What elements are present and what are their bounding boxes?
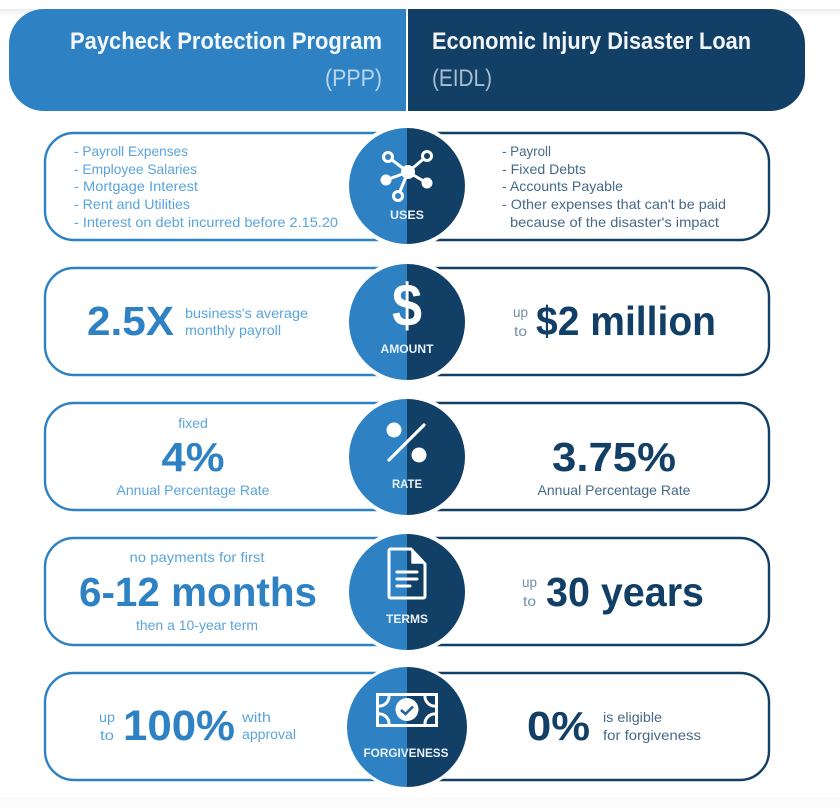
PPP forgiveness: with bbox=[241, 709, 271, 725]
uses badge bbox=[345, 124, 469, 248]
panel: terms bbox=[45, 530, 769, 654]
amount badge: AMOUNT bbox=[380, 342, 434, 356]
EIDL uses list bbox=[502, 143, 726, 230]
icon: network bbox=[382, 152, 432, 200]
EIDL amount: to bbox=[514, 323, 527, 339]
PPP rate bbox=[116, 415, 270, 498]
header: EIDL: Economic Injury Disaster Loan bbox=[432, 28, 751, 55]
PPP terms: then a 10-year term bbox=[136, 617, 258, 633]
EIDL forgiveness bbox=[527, 703, 701, 749]
header: PPP: (PPP) bbox=[325, 65, 382, 92]
terms badge: TERMS bbox=[386, 612, 428, 626]
EIDL forgiveness: is eligible bbox=[603, 709, 662, 725]
PPP amount: 2.5X bbox=[87, 298, 174, 344]
panel: forgiveness bbox=[45, 664, 769, 790]
PPP uses list: - Rent and Utilities bbox=[74, 196, 190, 212]
PPP amount: business's average bbox=[185, 305, 308, 321]
icon: dollar: $ bbox=[392, 272, 422, 339]
PPP terms: no payments for first bbox=[130, 549, 265, 565]
icon: banknote with check bbox=[378, 694, 436, 726]
EIDL amount: up bbox=[513, 304, 528, 320]
PPP rate: fixed bbox=[178, 415, 208, 431]
EIDL uses list: - Payroll bbox=[502, 143, 551, 159]
panel: amount bbox=[45, 260, 769, 384]
PPP forgiveness: approval bbox=[242, 726, 296, 742]
uses badge: USES bbox=[390, 208, 424, 222]
forgiveness badge: FORGIVENESS bbox=[364, 746, 448, 760]
EIDL forgiveness: for forgiveness bbox=[603, 727, 701, 743]
EIDL uses list: - Fixed Debts bbox=[502, 161, 586, 177]
header: PPP bbox=[9, 9, 406, 111]
header: EIDL bbox=[408, 9, 805, 111]
EIDL amount: $2 million bbox=[536, 298, 716, 344]
PPP forgiveness: to bbox=[100, 727, 114, 743]
terms badge bbox=[345, 530, 469, 654]
amount badge bbox=[345, 260, 469, 384]
icon: document bbox=[389, 549, 425, 598]
PPP terms bbox=[79, 549, 317, 633]
icon: percent bbox=[386, 422, 426, 462]
PPP uses list: - Employee Salaries bbox=[74, 161, 197, 177]
forgiveness badge bbox=[344, 664, 470, 790]
header: PPP: Paycheck Protection Program bbox=[70, 28, 382, 55]
rate badge bbox=[345, 395, 469, 519]
EIDL uses list: - Other expenses that can't be paid bbox=[502, 196, 726, 212]
PPP uses list: - Payroll Expenses bbox=[74, 143, 188, 159]
header: EIDL: (EIDL) bbox=[432, 65, 492, 92]
EIDL rate: Annual Percentage Rate bbox=[538, 482, 691, 498]
PPP amount: monthly payroll bbox=[185, 322, 281, 338]
EIDL uses box bbox=[407, 133, 769, 240]
PPP amount bbox=[87, 298, 308, 344]
PPP terms: 6-12 months bbox=[79, 569, 317, 615]
EIDL terms: 30 years bbox=[546, 569, 704, 615]
EIDL rate: 3.75% bbox=[552, 434, 676, 480]
PPP forgiveness: up bbox=[99, 709, 115, 725]
EIDL uses list: because of the disaster's impact bbox=[510, 214, 719, 230]
panel: rate bbox=[45, 395, 769, 519]
EIDL forgiveness: 0% bbox=[527, 703, 590, 749]
PPP forgiveness: 100% bbox=[123, 702, 235, 750]
PPP uses list: - Mortgage Interest bbox=[74, 178, 198, 194]
PPP forgiveness bbox=[99, 702, 296, 750]
panel: uses bbox=[45, 124, 769, 248]
PPP uses list bbox=[74, 143, 338, 230]
EIDL uses list: - Accounts Payable bbox=[502, 178, 623, 194]
PPP uses box bbox=[45, 133, 407, 240]
EIDL rate bbox=[538, 434, 691, 498]
PPP rate: 4% bbox=[162, 434, 224, 480]
PPP uses list: - Interest on debt incurred before 2.15.20 bbox=[74, 214, 338, 230]
EIDL terms: up bbox=[522, 574, 537, 590]
PPP rate: Annual Percentage Rate bbox=[116, 482, 270, 498]
rate badge: RATE bbox=[392, 477, 422, 491]
EIDL terms: to bbox=[523, 593, 536, 609]
